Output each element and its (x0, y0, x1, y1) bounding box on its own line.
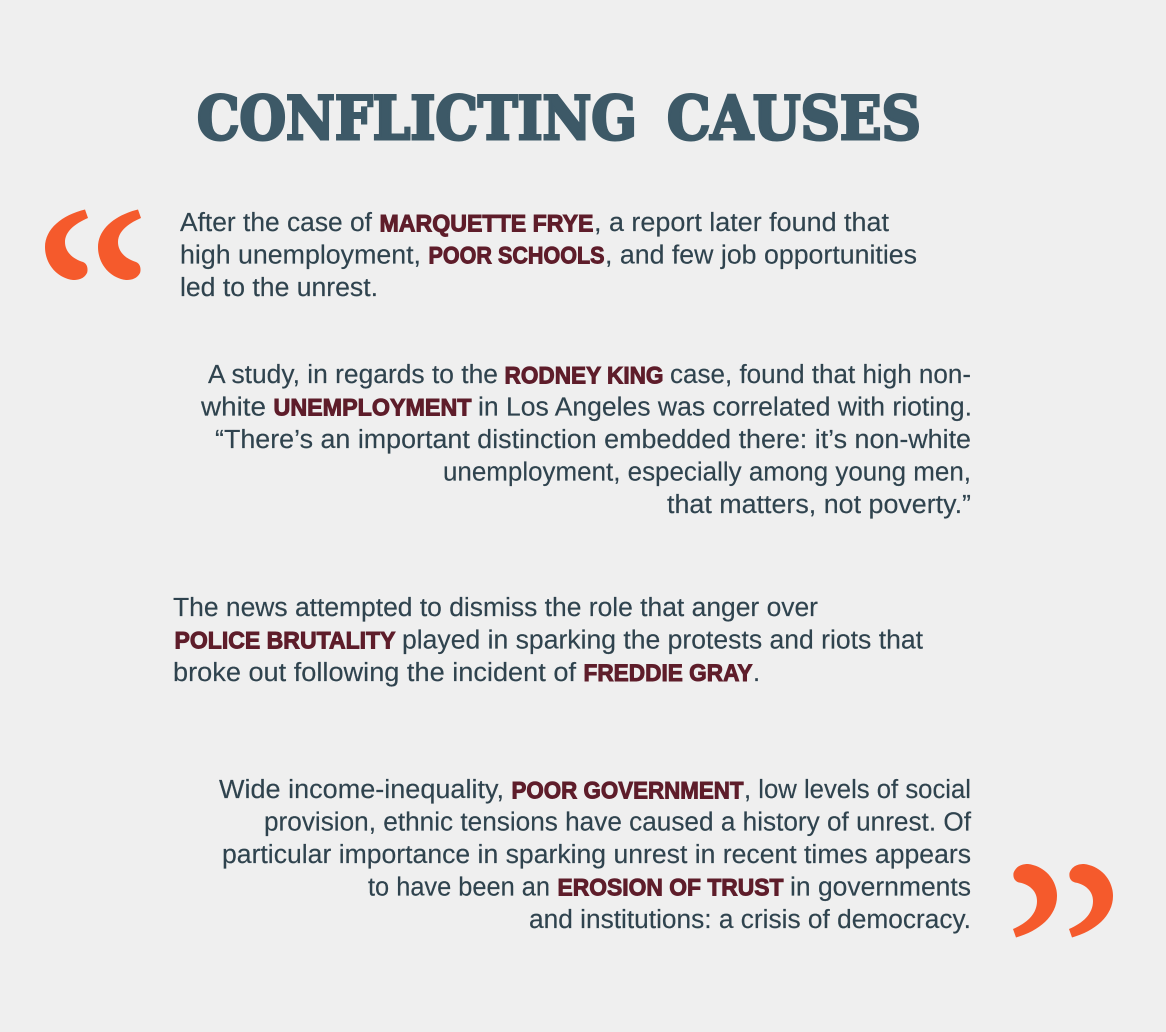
text block: Marquette Frye: MARQUETTE FRYE (380, 210, 594, 238)
text block: Rodney King: “There’s an important distinction embedded there: it’s non-white (215, 426, 971, 454)
text block: Rodney King: A study, in regards to the (208, 361, 498, 389)
text block: income inequality: POOR GOVERNMENT (512, 778, 744, 804)
text block: Rodney King: white (200, 394, 266, 422)
text block: income inequality: to have been an (368, 874, 550, 902)
text block: income inequality (219, 776, 972, 934)
text block: Marquette Frye: POOR SCHOOLS (428, 242, 604, 270)
text block: income inequality: , low levels of social (744, 776, 971, 804)
text block: Freddie Gray: The news attempted to dismiss the role that anger over (173, 594, 819, 622)
text block: Marquette Frye: high unemployment, (180, 242, 421, 270)
text block: Marquette Frye: , and few job opportunities (605, 242, 917, 270)
text block: Freddie Gray: FREDDIE GRAY (584, 660, 752, 687)
title: CAUSES (667, 84, 921, 154)
text block: income inequality: provision, ethnic tensions have caused a history of unrest. Of (264, 808, 972, 836)
text block: Rodney King (200, 361, 972, 519)
text block: Freddie Gray: broke out following the incident of (173, 659, 577, 687)
text block: income inequality: in governments (790, 874, 971, 902)
text block: Rodney King: UNEMPLOYMENT (274, 394, 472, 422)
text block: Rodney King: case, found that high non- (670, 361, 971, 389)
text block: Rodney King: RODNEY KING (504, 362, 664, 390)
text block: Marquette Frye: , a report later found that (594, 209, 889, 237)
text block: Rodney King: in Los Angeles was correlated with rioting. (478, 394, 972, 422)
text block: Marquette Frye: led to the unrest. (180, 274, 378, 302)
text block: income inequality: Wide income-inequality, (219, 776, 504, 804)
text block: Freddie Gray (173, 594, 923, 687)
text block: Rodney King: that matters, not poverty.” (667, 491, 971, 519)
title (197, 84, 921, 154)
title: CONFLICTING (197, 84, 637, 154)
text block: Freddie Gray: . (753, 659, 760, 687)
text block: Freddie Gray: played in sparking the protests and riots that (402, 626, 923, 654)
icon: closing quotation marks (1013, 864, 1113, 938)
text block: income inequality: particular importance in sparking unrest in recent times appears (222, 841, 971, 869)
text block: income inequality: and institutions: a crisis of democracy. (529, 906, 971, 934)
text block: Freddie Gray: POLICE BRUTALITY (174, 628, 396, 654)
icon: opening quotation marks (45, 210, 141, 280)
text block: Marquette Frye: After the case of (180, 209, 373, 237)
text block: income inequality: EROSION OF TRUST (558, 874, 784, 902)
text block: Rodney King: unemployment, especially among young men, (443, 458, 971, 486)
text block: Marquette Frye (180, 209, 917, 302)
